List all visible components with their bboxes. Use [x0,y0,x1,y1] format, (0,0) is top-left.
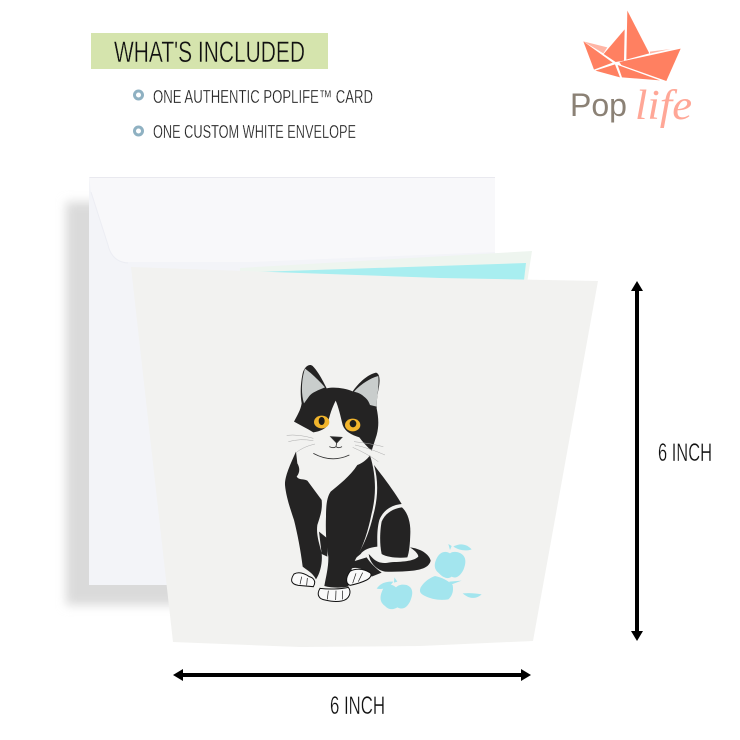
apples [377,544,482,609]
list item: envelope [134,121,356,142]
cat illustration with apples [285,365,482,609]
cat ears [302,369,379,407]
cat whiskers [287,435,385,462]
heading: what's included [91,33,328,69]
card back panel with teal interior [240,251,532,283]
label: width 6 inch: 6 INCH [330,692,385,720]
cat eyes [314,416,360,431]
envelope with shadow [66,177,495,605]
icon: paper boat [583,11,681,81]
cat body [285,452,431,588]
cat head [294,365,380,451]
card front [131,267,598,647]
logo: poplife paper boat [570,11,692,129]
logo: poplife paper boat: Pop [570,87,627,123]
label: height 6 inch: 6 INCH [658,439,712,467]
cat paws [292,569,371,601]
arrow: horizontal dimension [173,669,531,681]
arrow: vertical dimension [631,281,643,641]
cat face [313,437,349,459]
list item: card [134,86,373,107]
list item: envelope: ONE CUSTOM WHITE ENVELOPE [153,121,356,142]
list item: card: ONE AUTHENTIC POPLIFE™ CARD [153,86,373,107]
heading: what's included: WHAT'S INCLUDED [114,36,305,69]
logo: poplife paper boat: life [635,83,692,129]
